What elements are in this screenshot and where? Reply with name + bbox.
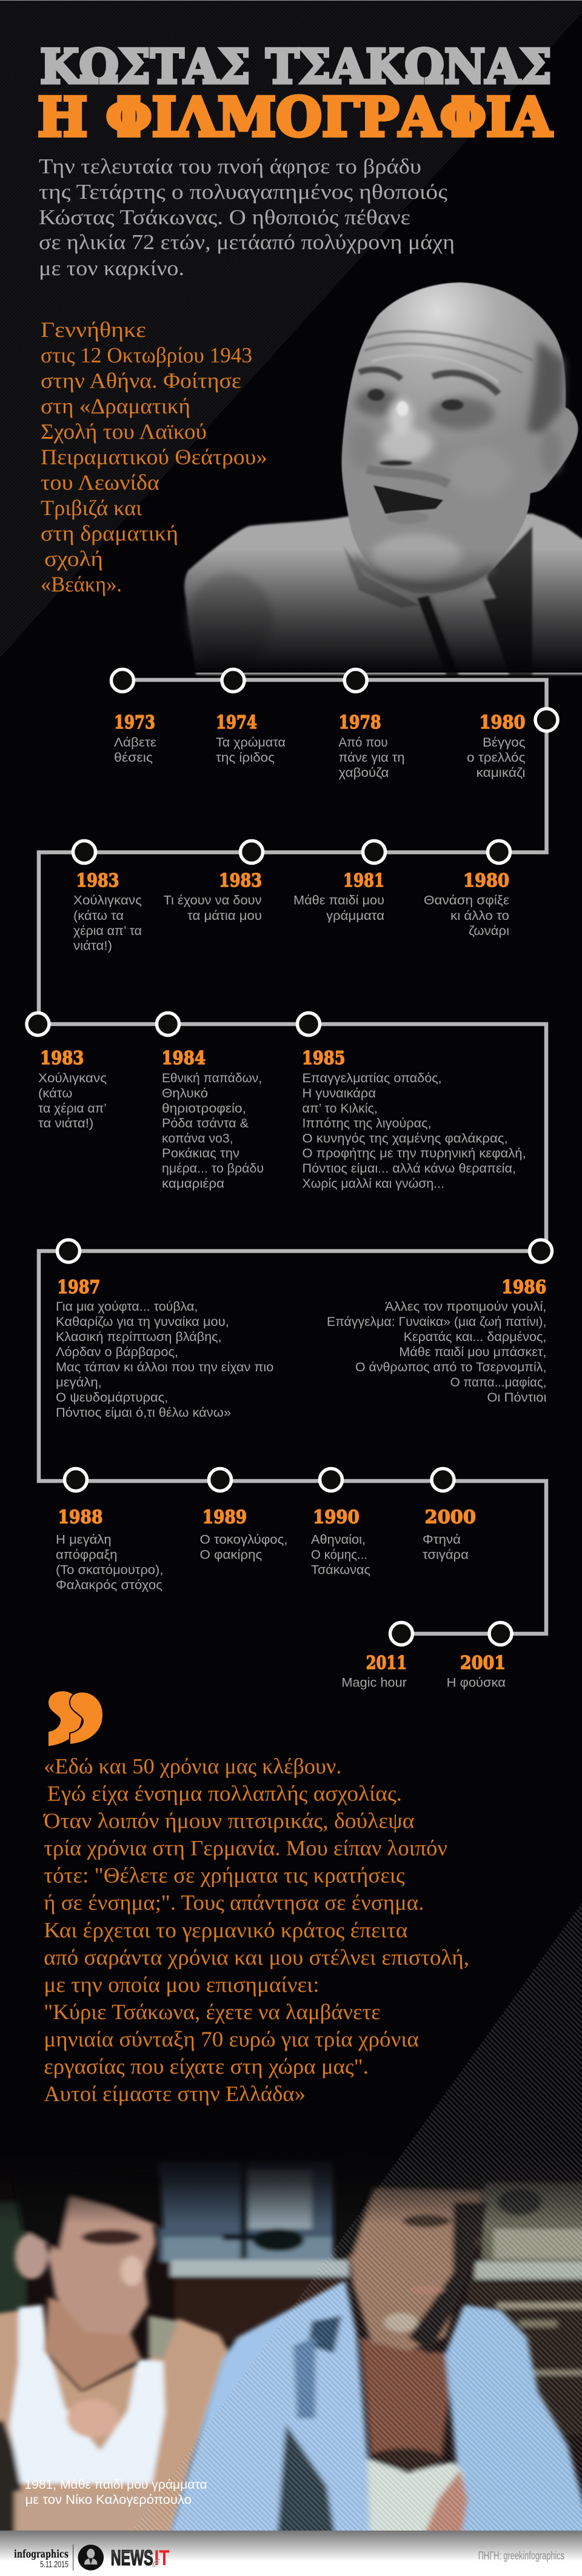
entry 1983 Hooligans second: τα χέρια απ’ — [38, 1102, 107, 1116]
entry 1983 Hooligans: χέρια απ’ τα — [73, 924, 142, 938]
entry 2011: Magic hour — [341, 1676, 407, 1690]
entry 1989: Ο φακίρης — [200, 1548, 262, 1562]
entry 1985: απ’ το Κιλκίς, — [302, 1102, 378, 1116]
icon: person logo — [78, 2544, 104, 2571]
striped diagonal panel bottom — [132, 1903, 582, 2531]
entry 1984: θηριοτροφείο, — [162, 1102, 246, 1116]
quotation text block: Αυτοί είμαστε στην Ελλάδα» — [44, 2082, 306, 2106]
entry 1986: Ο άνθρωπος από το Τσερνομπίλ, — [355, 1360, 546, 1374]
entry 1988: 1988 — [58, 1507, 103, 1528]
quotation text block: "Κύριε Τσάκωνα, έχετε να λαμβάνετε — [44, 2000, 381, 2024]
right man: shirt and chest — [167, 2278, 582, 2531]
newsit logo: NEWS — [111, 2546, 153, 2570]
portrait soft shading — [188, 341, 564, 667]
entry 1985: Πόντιος είμαι... αλλά κάνω θεραπεία, — [302, 1162, 516, 1176]
quotation text block: Και έρχεται το γερμανικό κράτος έπειτα — [44, 1918, 408, 1942]
entry 1980 Vengos: καμικάζι — [477, 766, 526, 780]
striped diagonal panel top — [0, 1, 582, 657]
entry 1986: Μάθε παιδί μου μπάσκετ, — [399, 1345, 546, 1359]
entry 1985: Ο κυνηγός της χαμένης φαλάκρας, — [302, 1131, 508, 1145]
entry 1980 Thanasi: 1980 — [463, 870, 509, 891]
entry 1983 Hooligans second: Χούλιγκανς — [38, 1071, 107, 1085]
entry 1984: ημέρα... το βράδυ — [162, 1162, 264, 1176]
entry 1985: Η γυναικάρα — [302, 1087, 376, 1100]
entry 1988: απόφραξη — [56, 1548, 118, 1562]
entry 1978: χαβούζα — [338, 766, 389, 780]
timeline line — [39, 680, 547, 1634]
entry 1978: Από που — [338, 736, 388, 750]
title: filmography: Η ΦΙΛΜΟΓΡΑΦΙΑ — [38, 85, 553, 148]
intro text block: σε ηλικία 72 ετών, μετάαπό πολύχρονη μάχη — [39, 230, 455, 254]
entry 2000 — [423, 1507, 476, 1562]
entry 1984: Θηλυκό — [162, 1087, 208, 1100]
quotation text block: Όταν λοιπόν ήμουν πιτσιρικάς, δούλεψα — [42, 1808, 415, 1832]
photo caption: 1981, Μάθε παιδί μου γράμματα — [24, 2478, 207, 2492]
intro text block: Κώστας Τσάκωνας. Ο ηθοποιός πέθανε — [39, 205, 410, 229]
entry 2000: τσιγάρα — [423, 1548, 469, 1562]
entry 1988 — [56, 1507, 163, 1593]
newsit logo: IT — [154, 2546, 170, 2570]
biography text block: του Λεωνίδα — [41, 470, 159, 494]
entry 1987: Μας τάπαν κι άλλοι που την είχαν πιο — [56, 1360, 273, 1374]
entry 1984 — [161, 1048, 264, 1191]
entry 1983 Ti echoun: 1983 — [219, 870, 262, 891]
entry 1980 Vengos: ο τρελλός — [467, 751, 525, 765]
entry 1980 Vengos — [467, 712, 526, 780]
right man: head — [334, 2154, 490, 2354]
entry 1985 — [302, 1048, 526, 1191]
entry 1983 Hooligans: Χούλιγκανς — [73, 893, 142, 908]
entry 1974 — [216, 712, 286, 765]
biography text block — [41, 318, 267, 596]
icon: quotation mark — [48, 1691, 103, 1746]
biography text block: «Βεάκη». — [41, 572, 122, 596]
entry 1984: καμαριέρα — [162, 1177, 224, 1191]
biography text block: στην Αθήνα. Φοίτησε — [41, 368, 241, 393]
biography text block: Τριβιζά και — [41, 496, 142, 520]
entry 2000: Φτηνά — [423, 1533, 461, 1546]
timeline nodes — [27, 669, 558, 1645]
entry 1984: 1984 — [161, 1048, 206, 1069]
entry 1983 Hooligans: νιάτα!) — [73, 939, 112, 953]
entry 1983 Hooligans: (κάτω τα — [73, 909, 124, 923]
entry 1980 Thanasi: ζωνάρι — [469, 924, 509, 938]
entry 1986: Κερατάς και... δαρμένος, — [404, 1330, 546, 1344]
entry 1980 Thanasi: Θανάση σφίξε — [424, 893, 509, 908]
entry 1983 Ti echoun — [164, 870, 262, 923]
entry 2001: 2001 — [460, 1652, 506, 1674]
entry 1983 Ti echoun: Τι έχουν να δουν — [164, 893, 262, 908]
entry 2000: 2000 — [425, 1507, 476, 1528]
footer band — [0, 2531, 582, 2576]
entry 1989: Ο τοκογλύφος, — [200, 1533, 287, 1546]
portrait photo of Kostas Tsakonas — [170, 282, 582, 674]
film still photo — [0, 2162, 582, 2531]
biography text block: Σχολή του Λαϊκού — [41, 419, 207, 444]
biography text block: στις 12 Οκτωβρίου 1943 — [41, 343, 252, 367]
entry 1987: 1987 — [57, 1277, 100, 1298]
quotation text block: «Εδώ και 50 χρόνια μας κλέβουν. — [44, 1754, 341, 1778]
entry 1985: 1985 — [302, 1048, 346, 1069]
entry 1990 — [311, 1507, 370, 1577]
photo caption: με τον Νίκο Καλογερόπουλο — [25, 2493, 192, 2507]
title: Kostas Tsakonas: ΚΩΣΤΑΣ ΤΣΑΚΩΝΑΣ — [40, 39, 552, 95]
entry 2011: 2011 — [366, 1652, 407, 1674]
biography text block: Γεννήθηκε — [41, 318, 146, 342]
entry 1986: Επάγγελμα: Γυναίκα» (μια ζωή πατίνι), — [327, 1315, 546, 1329]
entry 1990: 1990 — [313, 1507, 360, 1528]
intro text block: με τον καρκίνο. — [39, 256, 184, 280]
quotation text block: ή σε ένσημα;". Τους απάντησα σε ένσημα. — [44, 1890, 424, 1914]
entry 1985: Χωρίς μαλλί και γνώση... — [302, 1177, 444, 1191]
portrait mouth — [373, 485, 443, 514]
entry 1986: Άλλες τον προτιμούν γουλί, — [385, 1300, 546, 1314]
entry 1986: Ο παπα...μαφίας, — [450, 1376, 546, 1390]
entry 1978 — [338, 712, 405, 780]
entry 2001 — [447, 1652, 506, 1690]
footer infographics label: 5.11.2015 — [40, 2560, 69, 2570]
entry 1980 Thanasi — [424, 870, 509, 938]
quotation text block: τρία χρόνια στη Γερμανία. Μου είπαν λοιπόν — [44, 1835, 447, 1860]
biography text block: στη «Δραματική — [41, 394, 190, 418]
quotation text block: με την οποία μου επισημαίνει: — [44, 1972, 319, 1997]
left man: head — [11, 2169, 163, 2391]
entry 1989 — [200, 1507, 287, 1562]
quotation text block: μηνιαία σύνταξη 70 ευρώ για τρία χρόνια — [44, 2027, 419, 2051]
entry 1980 Thanasi: κι άλλο το — [450, 909, 509, 923]
entry 1974: Τα χρώματα — [216, 736, 286, 750]
entry 1983 Hooligans second: (κάτω — [38, 1087, 72, 1100]
entry 1986: Οι Πόντιοι — [487, 1391, 547, 1405]
entry 1986 — [327, 1277, 547, 1405]
entry 1987: Για μια χούφτα... τούβλα, — [56, 1300, 198, 1314]
entry 1983 Hooligans: 1983 — [76, 870, 119, 891]
entry 1981 — [293, 870, 384, 923]
entry 1973 — [114, 712, 156, 765]
entry 1978: πάνε για τη — [338, 751, 405, 765]
entry 1983 Hooligans second: τα νιάτα!) — [38, 1117, 93, 1131]
quotation text block — [42, 1754, 469, 2106]
entry 1987 — [56, 1277, 273, 1420]
entry 1985: Ιππότης της λιγούρας, — [302, 1117, 432, 1131]
quotation text block: τότε: "Θέλετε σε χρήματα τις κρατήσεις — [44, 1863, 405, 1887]
entry 1988: Η μεγάλη — [56, 1533, 112, 1546]
intro text block: Την τελευταία του πνοή άφησε το βράδυ — [39, 155, 421, 178]
portrait head — [342, 282, 578, 593]
entry 1981: γράμματα — [326, 909, 384, 923]
footer infographics label: infographics — [14, 2548, 69, 2561]
entry 1985: Επαγγελματίας οπαδός, — [302, 1071, 442, 1085]
entry 1973: θέσεις — [114, 751, 153, 765]
entry 1989: 1989 — [202, 1507, 247, 1528]
entry 1985: Ο προφήτης με την πυρηνική κεφαλή, — [302, 1147, 526, 1160]
entry 1990: Αθηναίοι, — [311, 1533, 366, 1546]
film still background — [0, 2162, 582, 2498]
biography text block: στη δραματική — [41, 521, 178, 545]
entry 1980 Vengos: Βέγγος — [483, 736, 525, 750]
entry 1990: Ο κόμης... — [311, 1548, 367, 1562]
photo caption — [24, 2478, 207, 2507]
entry 2011 — [341, 1652, 407, 1690]
entry 1988: (Το σκατόμουτρο), — [56, 1563, 163, 1577]
intro text block — [39, 155, 455, 280]
entry 1987: Λόρδαν ο βάρβαρος, — [56, 1345, 178, 1359]
entry 1984: κοπάνα νο3, — [162, 1131, 233, 1145]
entry 1984: Ρόδα τσάντα & — [162, 1117, 249, 1131]
quotation text block: Εγώ είχα ένσημα πολλαπλής ασχολίας. — [47, 1781, 402, 1805]
intro text block: της Τετάρτης ο πολυαγαπημένος ηθοποιός — [39, 180, 447, 204]
quotation text block: από σαράντα χρόνια και μου στέλνει επιστολή, — [44, 1945, 469, 1969]
entry 1983 Hooligans second: 1983 — [40, 1048, 84, 1069]
entry 1978: 1978 — [338, 712, 381, 733]
entry 1973: Λάβετε — [114, 736, 156, 750]
entry 1983 Hooligans — [73, 870, 142, 953]
biography text block: Πειραματικού Θεάτρου» — [41, 445, 267, 469]
entry 1987: Καθαρίζω για τη γυναίκα μου, — [56, 1315, 229, 1329]
entry 1981: Μάθε παιδί μου — [293, 893, 384, 908]
quotation text block: εργασίας που είχατε στη χώρα μας". — [44, 2054, 369, 2078]
entry 1974: 1974 — [216, 712, 257, 733]
entry 1987: Πόντιος είμαι ό,τι θέλω κάνω» — [56, 1406, 231, 1420]
left man: torso and singlet — [0, 2301, 230, 2531]
portrait facial features — [359, 331, 533, 524]
entry 1973: 1973 — [114, 712, 155, 733]
portrait body — [184, 514, 582, 674]
entry 1984: Ροκάκιας την — [162, 1147, 239, 1160]
entry 2001: Η φούσκα — [447, 1676, 506, 1690]
entry 1981: 1981 — [343, 870, 384, 891]
entry 1988: Φαλακρός στόχος — [56, 1578, 162, 1593]
biography text block: σχολή — [44, 547, 103, 571]
entry 1983 Ti echoun: τα μάτια μου — [187, 909, 262, 923]
entry 1983 Hooligans second — [38, 1048, 107, 1131]
entry 1980 Vengos: 1980 — [479, 712, 525, 733]
entry 1974: της ίριδος — [216, 751, 275, 765]
entry 1987: μεγάλη, — [56, 1376, 102, 1390]
entry 1986: 1986 — [501, 1277, 546, 1298]
entry 1990: Τσάκωνας — [311, 1563, 370, 1577]
entry 1987: Ο ψευδομάρτυρας, — [56, 1391, 168, 1405]
footer infographics label — [14, 2548, 69, 2570]
entry 1984: Εθνική παπάδων, — [162, 1071, 262, 1085]
entry 1987: Κλασική περίπτωση βλάβης, — [56, 1330, 222, 1344]
